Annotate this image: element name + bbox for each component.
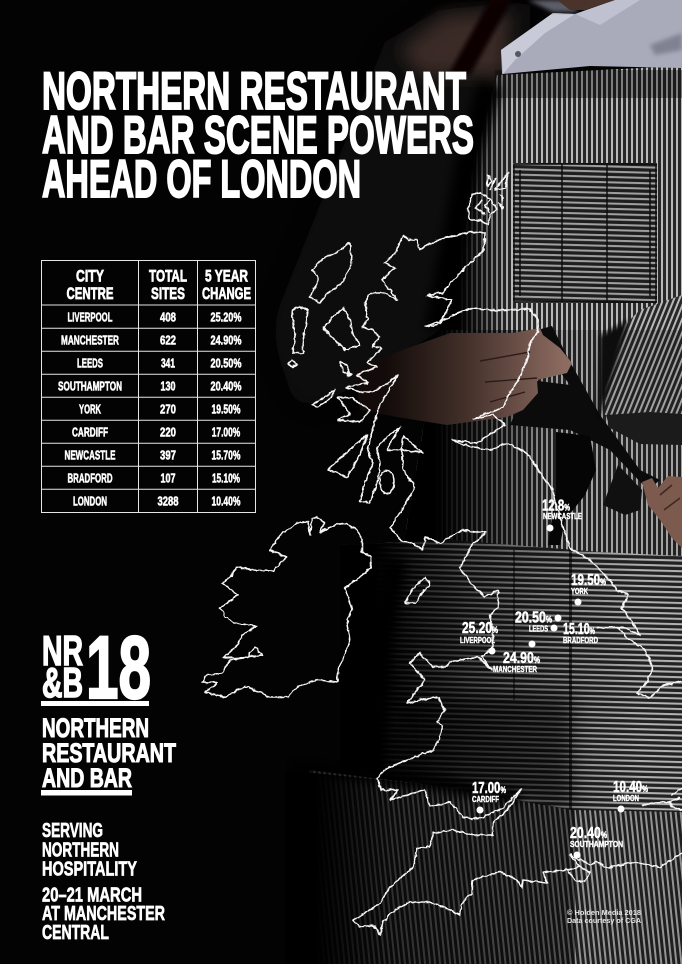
row: Cardiff: 17.00% [212, 426, 240, 440]
title: AHEAD OF LONDON [42, 150, 361, 209]
Scottish north and east coast [403, 232, 682, 698]
table header [66, 267, 251, 303]
row: Manchester [61, 334, 242, 348]
map of Britain and Ireland [202, 173, 682, 935]
row: Newcastle: NEWCASTLE [64, 448, 116, 462]
apron tie [510, 320, 682, 545]
row: York [79, 402, 240, 416]
Bradford marker: 15.10% [563, 621, 595, 638]
York marker: 19.50% [571, 572, 606, 589]
row: Southampton: 20.40% [210, 380, 242, 394]
Bradford marker: BRADFORD [563, 635, 598, 645]
row: Cardiff: CARDIFF [72, 426, 108, 440]
row: Liverpool: LIVERPOOL [68, 310, 113, 324]
table header: CHANGE [202, 284, 251, 303]
photo: chef in striped apron [270, 0, 682, 964]
Thames estuary [643, 788, 682, 810]
event date and venue: 20–21 MARCH [42, 885, 142, 907]
row: Leeds: 20.50% [210, 356, 242, 370]
row: Manchester: MANCHESTER [61, 334, 119, 348]
second hand [642, 476, 682, 548]
table grid [42, 260, 256, 512]
island of Arran [380, 470, 394, 494]
row: York: 270 [160, 402, 176, 416]
Isle of Wight [567, 867, 590, 882]
Leeds marker: LEEDS [529, 624, 548, 634]
apron chest pocket [513, 163, 657, 303]
event logo: NR&B 18: NR [42, 627, 83, 674]
Manchester marker: MANCHESTER [493, 664, 537, 674]
row: Bradford: 107 [160, 472, 176, 486]
Orkney and Shetland [468, 173, 508, 225]
event name [41, 713, 176, 796]
apron lower pocket [340, 540, 682, 812]
Liverpool marker: 25.20% [462, 620, 498, 637]
event name: NORTHERN [42, 713, 149, 743]
apron lower stripes [285, 560, 682, 964]
Cardiff marker [472, 780, 506, 814]
Scottish islands [288, 243, 370, 477]
row: Southampton: 130 [160, 380, 176, 394]
row: Southampton [58, 380, 242, 394]
row: London: LONDON [73, 495, 107, 509]
event logo: NR&B 18 [41, 617, 151, 717]
table header: CENTRE [66, 284, 114, 303]
Bradford marker [550, 621, 598, 645]
London marker: 10.40% [613, 779, 648, 796]
Great Britain outline [345, 235, 682, 935]
row: Liverpool: 25.20% [210, 310, 242, 324]
table: city centre sites and five year change [42, 260, 256, 512]
row: York: YORK [79, 402, 101, 416]
row: Bradford [68, 472, 240, 486]
event name: AND BAR [42, 763, 132, 793]
row: Newcastle: 15.70% [212, 448, 240, 462]
row: Liverpool: 408 [160, 310, 176, 324]
Newcastle marker: 12.8% [542, 498, 570, 514]
table header: CITY [76, 267, 104, 286]
event logo: NR&B 18: &B [42, 659, 83, 706]
York marker: YORK [571, 586, 588, 596]
row: Southampton: SOUTHAMPTON [58, 380, 122, 394]
Liverpool marker: LIVERPOOL [460, 635, 495, 645]
row: York: 19.50% [212, 402, 240, 416]
row: Cardiff [72, 426, 240, 440]
row: Manchester: 24.90% [210, 334, 242, 348]
event logo: NR&B 18: 18 [86, 617, 151, 717]
tagline: NORTHERN [42, 840, 119, 862]
Newcastle marker: NEWCASTLE [543, 511, 582, 521]
row: Leeds: LEEDS [77, 356, 103, 370]
Leeds marker [515, 610, 562, 634]
event name: RESTAURANT [42, 738, 176, 768]
event date and venue: CENTRAL [42, 922, 109, 944]
Ireland outline [202, 517, 372, 697]
copyright credit: © Holden Media 2018 [567, 908, 641, 917]
tagline: SERVING [42, 820, 103, 842]
Southampton marker: SOUTHAMPTON [570, 839, 623, 849]
shoulder and sleeve [270, 0, 530, 420]
Southampton marker [570, 825, 623, 858]
event date and venue [42, 885, 165, 944]
tagline [42, 820, 137, 881]
row: Manchester: 622 [160, 334, 176, 348]
row: Bradford: BRADFORD [68, 472, 112, 486]
Isle of Man [405, 577, 430, 603]
row: Newcastle [64, 448, 240, 462]
London marker [613, 779, 648, 812]
city markers and values [460, 498, 648, 858]
table header: TOTAL [149, 267, 187, 286]
copyright credit [567, 908, 642, 925]
Southampton marker: 20.40% [570, 825, 607, 842]
row: Newcastle: 397 [160, 448, 176, 462]
London marker: LONDON [613, 793, 639, 803]
table header: SITES [151, 284, 185, 303]
Manchester marker: 24.90% [503, 650, 540, 667]
title [42, 62, 474, 209]
row: Bradford: 15.10% [212, 472, 240, 486]
Leeds marker: 20.50% [515, 610, 552, 627]
Manchester marker [493, 640, 540, 674]
Cardiff marker: CARDIFF [472, 794, 499, 804]
jacket [501, 0, 682, 74]
row: Leeds [77, 356, 242, 370]
row: London: 10.40% [212, 495, 240, 509]
row: Cardiff: 220 [160, 426, 176, 440]
copyright credit: Data courtesy of CGA [567, 916, 642, 925]
Newcastle marker [542, 498, 582, 532]
apron upper stripes [400, 66, 682, 565]
row: London [73, 495, 240, 509]
row: Leeds: 341 [161, 356, 175, 370]
tagline: HOSPITALITY [42, 859, 137, 881]
York marker [571, 572, 606, 606]
event date and venue: AT MANCHESTER [42, 903, 165, 925]
row: London: 3288 [158, 495, 179, 509]
hand holding tie [355, 328, 572, 425]
row: Liverpool [68, 310, 242, 324]
Liverpool marker [460, 620, 498, 654]
Cardiff marker: 17.00% [472, 780, 506, 797]
table header: 5 YEAR [205, 267, 248, 286]
